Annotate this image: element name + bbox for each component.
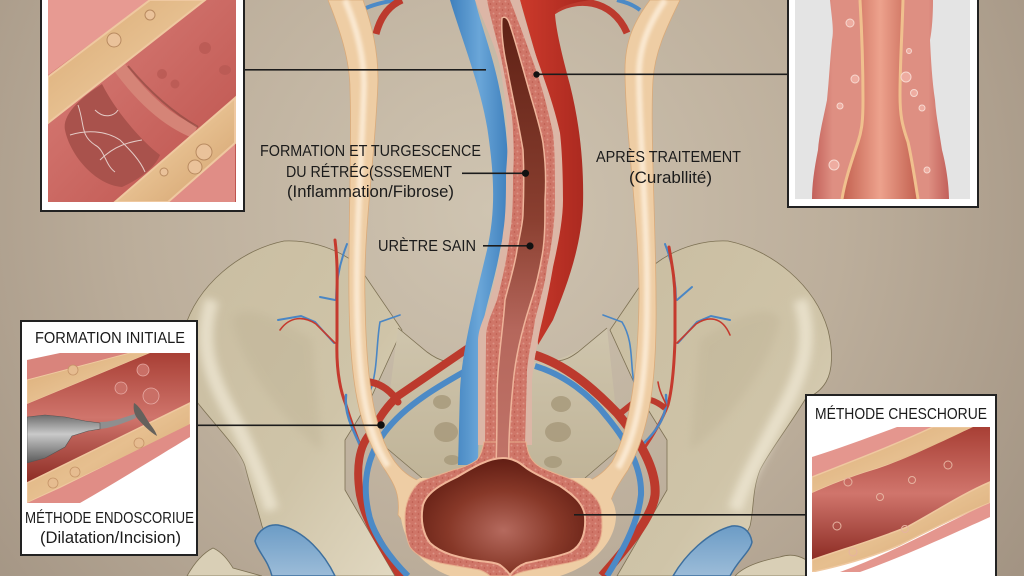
panel: after treatment close-up [788,0,978,207]
sacral foramina [433,395,571,468]
panel heading: MÉTHODE CHESCHORUE [815,406,987,423]
instrument [100,414,136,429]
vessel illustration [812,427,990,572]
label: after treatment: APRÈS TRAITEMENT [596,149,741,166]
pelvis: right iliac wing [610,241,832,576]
urethra lumen [496,17,546,465]
tissue band: lower [115,98,235,202]
label: after treatment [596,149,741,187]
panel heading: FORMATION INITIALE [35,330,185,347]
central artery [520,0,590,345]
iliac artery: left [358,340,480,576]
side vessels: right [603,244,730,450]
panel: healthy-to-stricture close-up [41,0,244,211]
iliac vein: right [535,366,641,576]
leader line: top-left panel to vein [245,69,486,71]
label: stricture formation: FORMATION ET TURGESCENCE [260,143,481,160]
leader line: top-right panel to urethra [533,71,787,78]
urethra outer wall [475,0,563,445]
panel sub-caption: (Dilatation/Incision) [40,528,181,547]
vesicles [833,461,952,556]
iliac vein: left [366,364,478,576]
leader line: bottom-left panel [198,421,385,429]
right tan tube [582,0,680,535]
strictured tissue with fibrous cracks [65,84,160,187]
label: after treatment: (Curabllité) [629,168,712,187]
leader line: stricture label [462,170,529,177]
vesicles [115,364,159,404]
fold ring [120,68,195,132]
bladder tan outer wall [400,478,616,576]
endoscope illustration [27,353,190,503]
tissue band: upper [48,0,205,123]
vesicles [107,10,212,176]
top branch vessels [366,0,640,34]
leader line: healthy urethra label [483,242,534,250]
urethra spongy tissue [485,0,555,445]
label: stricture formation: DU RÉTRÉC(SSSEMENT [286,164,452,181]
label: stricture formation: (Inflammation/Fibrose) [287,182,454,201]
pelvis: lower bones and hip sockets [187,525,822,576]
tan lining lines [842,0,918,199]
bladder muscular wall [405,442,602,576]
panel: surgical method [806,395,996,576]
iliac artery: right [535,355,665,576]
bladder lumen [422,458,585,575]
pelvis: sacrum [383,328,620,478]
leader line: bottom-right panel [574,514,806,516]
bladder [400,17,616,576]
panel caption: MÉTHODE ENDOSCORIUE [25,510,194,527]
urethra [475,0,563,445]
side vessels: left [278,240,400,450]
vesicles [829,19,930,173]
label: stricture formation [260,143,481,201]
label: healthy urethra: URÈTRE SAIN [378,238,476,255]
panel: initial formation / endoscopic method [21,321,197,555]
left tan tube [328,0,425,530]
central vein [450,0,508,465]
restored wall [812,0,949,199]
lumen [48,0,236,202]
pelvis: left iliac wing [182,241,402,576]
restored lumen [842,0,918,199]
